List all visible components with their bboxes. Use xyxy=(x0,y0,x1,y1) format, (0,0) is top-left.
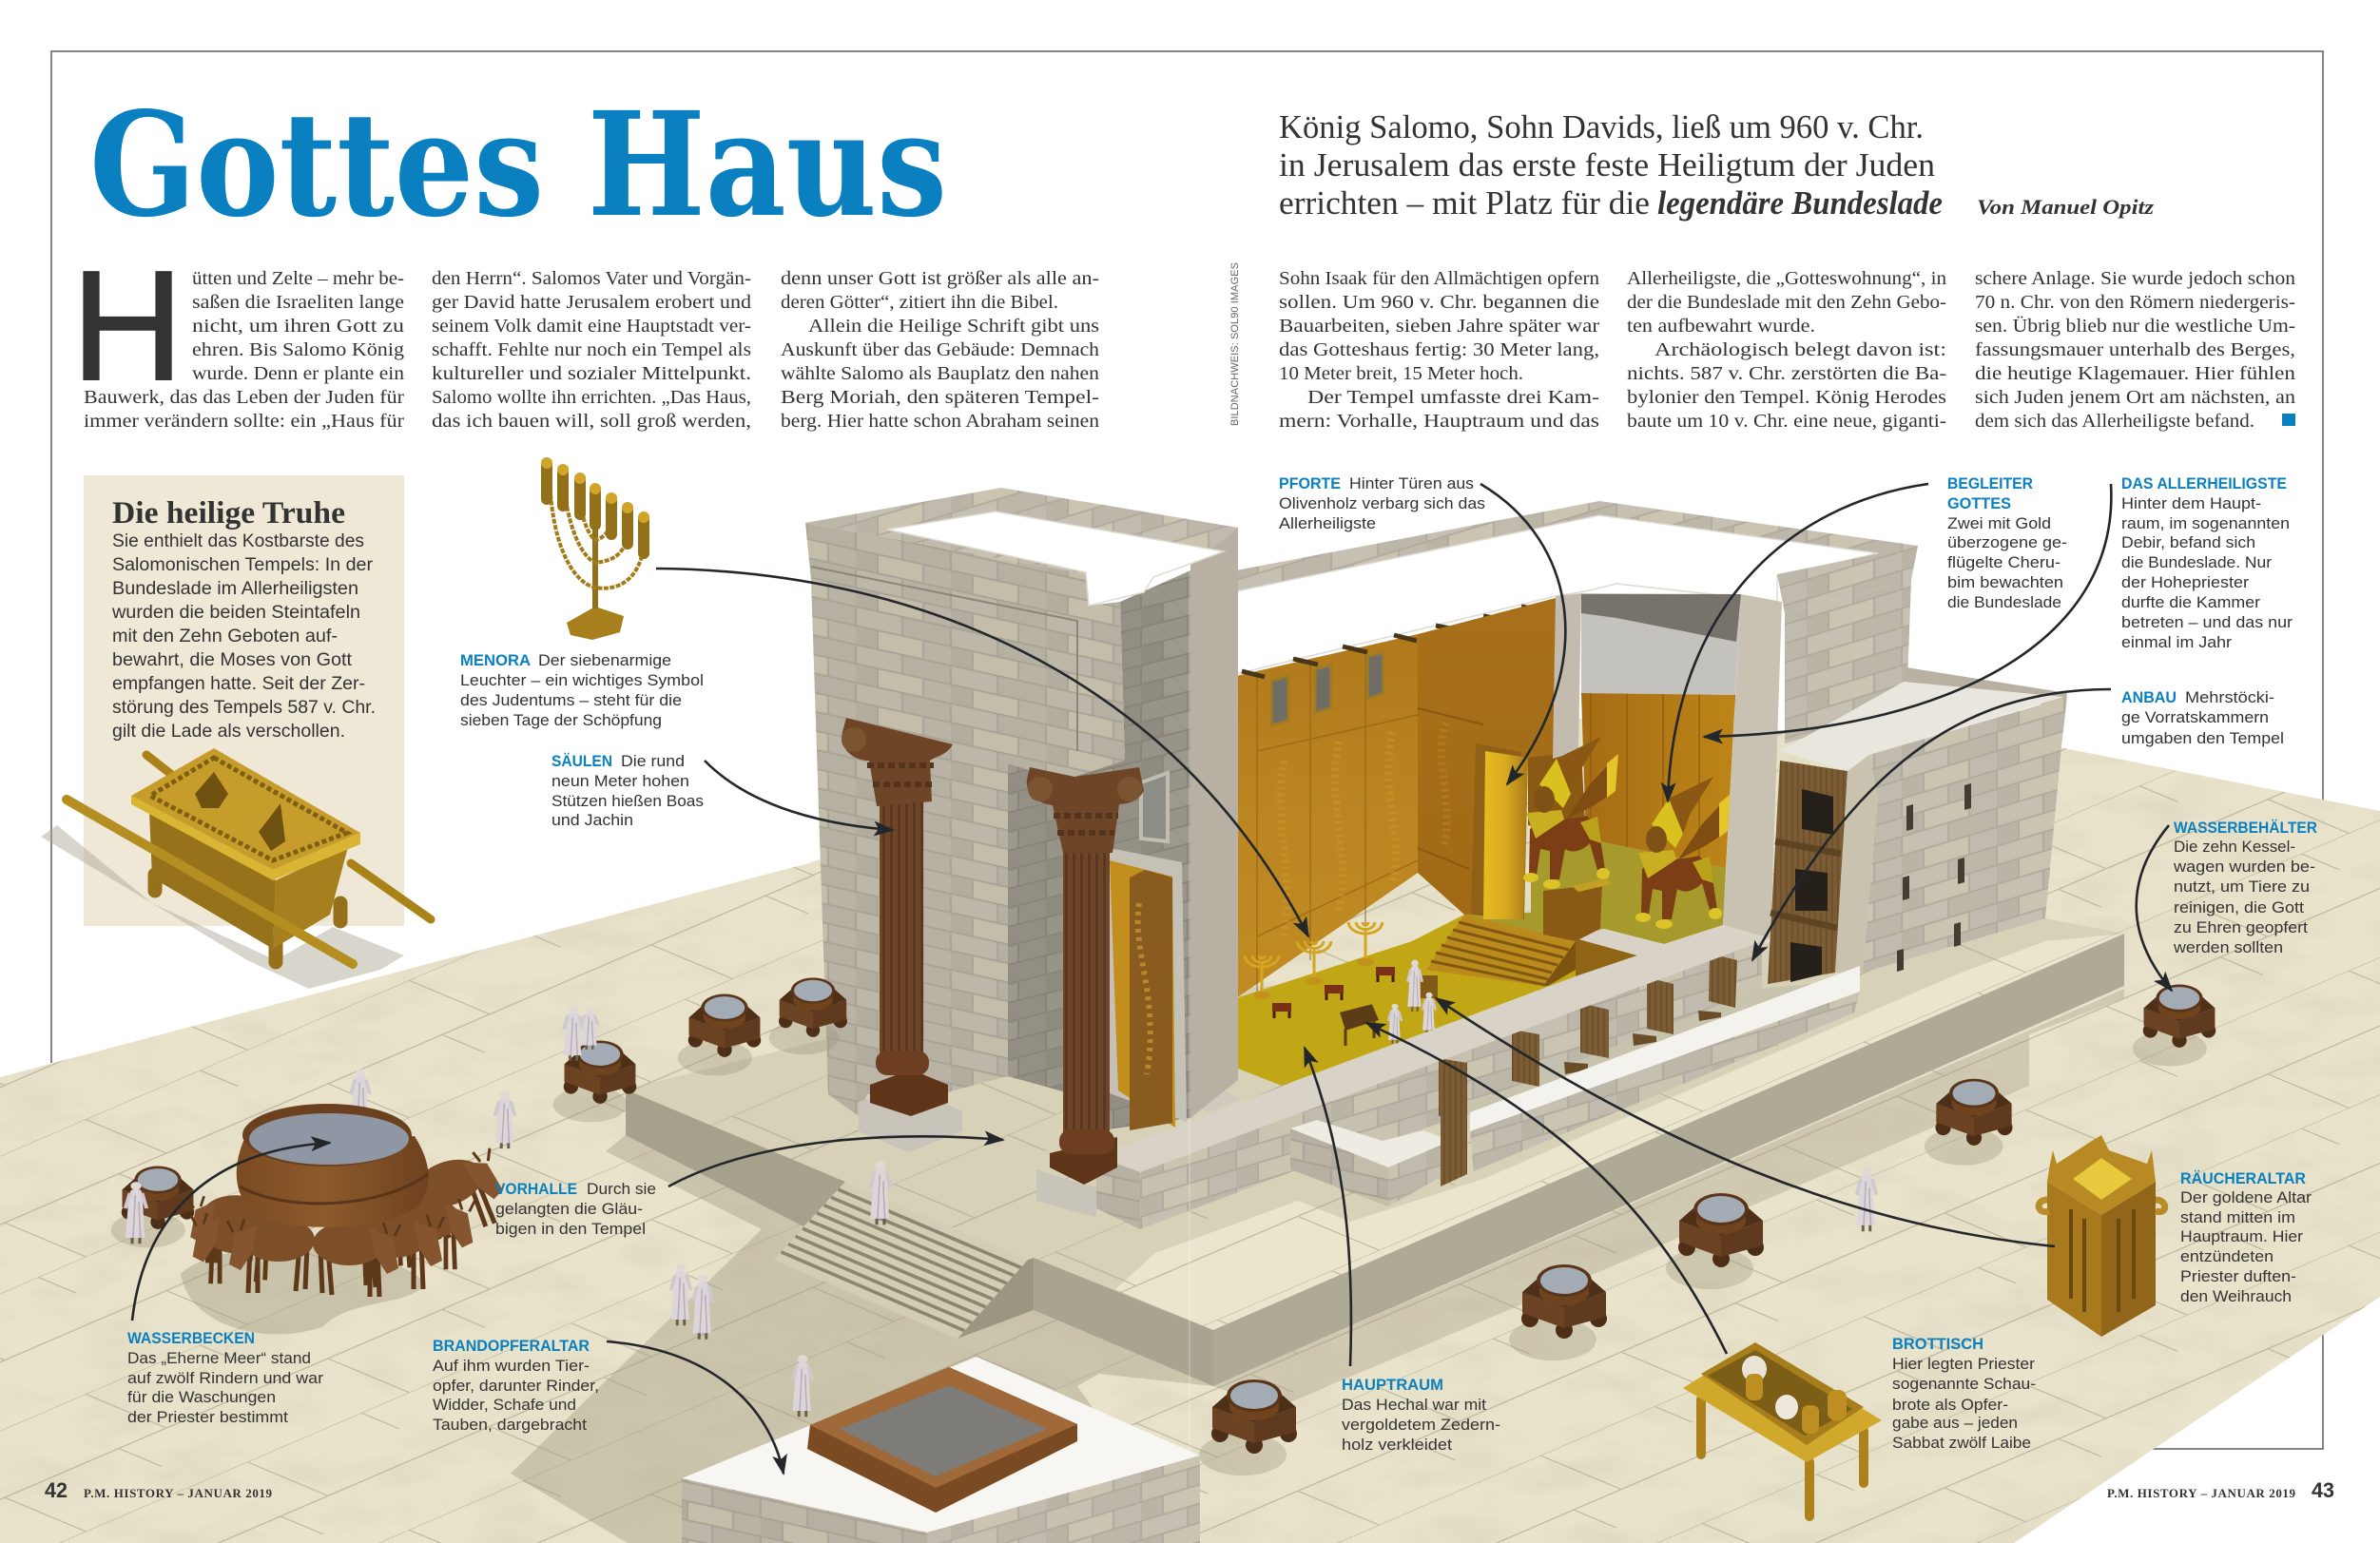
article column 6: 70 n. Chr. von den Römern niedergeris- xyxy=(1975,292,2295,313)
arrow: Räucheraltar xyxy=(1436,998,2055,1246)
article column 4: Bauarbeiten, sieben Jahre später war xyxy=(1279,316,1599,337)
temple podium xyxy=(626,918,2124,1386)
sidebar text: wurden die beiden Steintafeln xyxy=(111,603,360,623)
label: Das Allerheiligste: Debir, befand sich xyxy=(2121,533,2255,551)
tower white roof xyxy=(887,511,1224,606)
label: Brottisch: Hier legten Priester xyxy=(1892,1355,2035,1373)
label: Vorhalle: bigen in den Tempel xyxy=(495,1220,646,1238)
corridor inner wall xyxy=(1140,941,1762,1229)
article column 4 xyxy=(1279,268,1599,432)
deck text: in Jerusalem das erste feste Heiligtum der Juden xyxy=(1279,146,1935,183)
wall ornament trees xyxy=(1281,732,1395,936)
label: Brandopferaltar: Widder, Schafe und xyxy=(433,1396,576,1414)
podium left wall xyxy=(626,1090,845,1226)
label: Räucheraltar: Hauptraum. Hier xyxy=(2180,1227,2303,1245)
article column 3: berg. Hier hatte schon Abraham seinen xyxy=(781,411,1099,432)
article column 3 xyxy=(781,268,1099,432)
label: Vorhalle: Durch sie xyxy=(587,1180,656,1198)
arrow: Wasserbehälter xyxy=(2137,825,2172,991)
sidebar text: Salomonischen Tempels: In der xyxy=(112,555,374,575)
altar panels xyxy=(2071,1209,2134,1312)
sea shadow xyxy=(181,1246,426,1334)
cherub 1 xyxy=(1523,737,1618,889)
arrow: Brottisch xyxy=(1366,1023,1727,1354)
altar handles xyxy=(2039,1200,2165,1212)
rear block cap xyxy=(1777,546,1918,613)
label: Anbau: Mehrstöcki- xyxy=(2185,688,2274,706)
temple door opening xyxy=(1110,848,1187,1130)
arrow: Menora xyxy=(656,569,1308,936)
article column 1: ütten und Zelte – mehr be- xyxy=(192,268,404,289)
byline: Von Manuel Opitz xyxy=(1977,195,2154,219)
article column 6: schere Anlage. Sie wurde jedoch schon xyxy=(1975,268,2295,289)
porch rear wall lit xyxy=(847,719,1074,1094)
article column 4: mern: Vorhalle, Hauptraum und das xyxy=(1279,411,1599,432)
arrow: Begleiter Gottes xyxy=(1668,484,1928,801)
strip beside pit xyxy=(1576,929,1664,955)
altar white platform xyxy=(682,1357,1200,1533)
arrow: Anbau xyxy=(1752,689,2111,960)
article column 3: Berg Moriah, den späteren Tempel- xyxy=(781,387,1099,408)
label: Räucheraltar: RÄUCHERALTAR xyxy=(2180,1169,2306,1187)
partition pillar xyxy=(1553,593,1581,759)
article column 6 xyxy=(1975,268,2295,432)
sidebar text: Bundeslade im Allerheiligsten xyxy=(112,579,358,599)
temple door leaf xyxy=(1130,870,1172,1130)
article column 4: sollen. Um 960 v. Chr. begannen die xyxy=(1279,292,1599,313)
label: Brandopferaltar: opfer, darunter Rinder, xyxy=(433,1377,599,1395)
annex rear parapet xyxy=(1904,667,2067,708)
label: Wasserbehälter: Die zehn Kessel- xyxy=(2174,838,2295,856)
gilded wall panels xyxy=(1257,648,1418,993)
article column 1: Bauwerk, das das Leben der Juden für xyxy=(84,387,404,408)
label: Das Allerheiligste: DAS ALLERHEILIGSTE xyxy=(2121,474,2287,492)
porch side wall dark xyxy=(1008,763,1066,1092)
article column 2: ger David hatte Jerusalem erobert und xyxy=(432,292,751,313)
holy of holies floor xyxy=(1464,825,1726,944)
lid crown rim xyxy=(150,758,347,860)
tray walls xyxy=(1701,1342,1864,1445)
ark left face xyxy=(149,811,276,949)
storage floor beams xyxy=(1770,841,1841,928)
tower cut wall xyxy=(1190,528,1238,1118)
menorah arms xyxy=(551,494,644,588)
altar right face xyxy=(2101,1182,2156,1337)
label: Wasserbehälter: wagen wurden be- xyxy=(2173,858,2315,876)
title: Gottes Haus xyxy=(89,80,947,249)
main low wall end face xyxy=(1096,1156,1140,1229)
label: Brottisch: sogenannte Schau- xyxy=(1892,1375,2036,1393)
article column 6: sen. Übrig blieb nur die westliche Um- xyxy=(1975,315,2295,337)
arrow: Das Allerheiligste xyxy=(1704,484,2111,737)
label: Hauptraum: HAUPTRAUM xyxy=(1342,1376,1443,1394)
sidebar text: bewahrt, die Moses von Gott xyxy=(112,650,353,670)
altar bronze body xyxy=(807,1367,1077,1513)
sidebar text: mit den Zehn Geboten auf- xyxy=(112,627,338,646)
miniature incense altar xyxy=(1421,975,1438,998)
tray inner xyxy=(1708,1350,1852,1436)
deck text: König Salomo, Sohn Davids, ließ um 960 v. Chr. xyxy=(1279,108,1924,145)
storage openings xyxy=(1790,789,1833,982)
label: Anbau xyxy=(2121,688,2284,747)
article column 5: Allerheiligste, die „Gotteswohnung“, in xyxy=(1627,268,1946,289)
label: Säulen: Die rund xyxy=(621,752,685,770)
footer right: 43 xyxy=(2312,1478,2334,1502)
label: Menora: MENORA xyxy=(460,651,531,669)
annex wooden storage front xyxy=(1768,761,1848,984)
label: Begleiter Gottes: flügelte Cheru- xyxy=(1947,553,2061,571)
label: Das Allerheiligste: die Bundeslade. Nur xyxy=(2121,553,2272,571)
menorah lamps xyxy=(547,466,644,553)
label: Räucheraltar: Der goldene Altar xyxy=(2180,1188,2312,1206)
article column 2 xyxy=(432,268,751,432)
label: Räucheraltar xyxy=(2180,1169,2312,1305)
label: Das Allerheiligste xyxy=(2121,474,2293,651)
menorah base xyxy=(567,607,624,640)
inner stairs xyxy=(1426,915,1576,986)
article column 3: wählte Salomo als Bauplatz den nahen xyxy=(781,363,1099,384)
menorah flames xyxy=(547,463,644,517)
ark feet xyxy=(155,875,340,962)
article column 2: den Herrn“. Salomos Vater und Vorgän- xyxy=(432,268,751,289)
label: Brottisch: brote als Opfer- xyxy=(1892,1396,2008,1414)
label: Brandopferaltar: Auf ihm wurden Tier- xyxy=(433,1357,590,1375)
article column 5: Archäologisch belegt davon ist: xyxy=(1654,339,1946,360)
rear wall ornament xyxy=(1442,723,1447,846)
footer right: P.M. HISTORY – JANUAR 2019 xyxy=(2107,1486,2295,1500)
rear block wall xyxy=(1785,580,1911,743)
clerestory windows xyxy=(1271,652,1383,725)
label: Menora xyxy=(460,651,704,729)
label: Pforte: Allerheiligste xyxy=(1279,514,1376,532)
article column 6: die heutige Klagemauer. Hier fühlen xyxy=(1975,363,2295,384)
article column 1 xyxy=(84,268,404,432)
courtyard shadow left of stairs xyxy=(511,1135,1213,1543)
article column 6: fassungsmauer unterhalb des Berges, xyxy=(1975,339,2295,360)
picture credit: BILDNACHWEIS: SOL90 IMAGES xyxy=(1229,262,1241,426)
label: Wasserbecken: auf zwölf Rindern und war xyxy=(127,1369,323,1387)
wall slits xyxy=(1897,783,1971,972)
main low wall top xyxy=(1097,925,1770,1172)
sidebar panel background: die heilige Truhe xyxy=(84,475,404,926)
stairs xyxy=(774,1182,1034,1339)
label: Hauptraum: vergoldetem Zedern- xyxy=(1342,1416,1500,1434)
label: Menora: des Judentums – steht für die xyxy=(460,691,682,709)
interior priests xyxy=(1388,959,1436,1044)
annex big side wall xyxy=(1863,697,2067,973)
podium lit paving xyxy=(1115,934,2124,1330)
article column 2: schafft. Fehlte nur noch ein Tempel als xyxy=(432,339,751,360)
label: Begleiter Gottes: überzogene ge- xyxy=(1947,533,2067,551)
label: Das Allerheiligste: Hinter dem Haupt- xyxy=(2121,494,2261,512)
label: Brottisch: BROTTISCH xyxy=(1892,1335,1983,1353)
sidebar text: Sie enthielt das Kostbarste des xyxy=(112,531,364,551)
capital xyxy=(842,718,953,806)
label: Begleiter Gottes: GOTTES xyxy=(1947,494,2011,512)
label: Wasserbehälter: reinigen, die Gott xyxy=(2174,898,2304,916)
article column 1: immer verändern sollte: ein „Haus für xyxy=(84,411,404,432)
ceiling beams xyxy=(1242,607,1542,677)
article column 5: der die Bundeslade mit den Zehn Gebo- xyxy=(1627,292,1946,313)
label: Das Allerheiligste: einmal im Jahr xyxy=(2121,633,2232,651)
altar bowl xyxy=(2073,1158,2132,1200)
label: Menora: sieben Tage der Schöpfung xyxy=(460,711,662,729)
water carts xyxy=(111,977,2216,1475)
altar rim xyxy=(810,1367,1077,1488)
footer left: P.M. HISTORY – JANUAR 2019 xyxy=(84,1486,272,1500)
label: Wasserbecken xyxy=(127,1329,323,1426)
cherub 2 xyxy=(1635,777,1731,929)
label: Wasserbehälter: nutzt, um Tiere zu xyxy=(2174,878,2310,896)
gilded left wall xyxy=(1236,634,1418,998)
article column 1: saßen die Israeliten lange xyxy=(192,292,404,313)
label: Vorhalle: VORHALLE xyxy=(495,1180,577,1198)
drop cap: H xyxy=(71,239,184,413)
article column 5: baute um 10 v. Chr. eine neue, giganti- xyxy=(1627,411,1946,432)
label: Menora: Leuchter – ein wichtiges Symbol xyxy=(460,671,704,689)
interior stools xyxy=(1272,967,1395,1018)
ark chest xyxy=(1543,878,1612,941)
label: Säulen: und Jachin xyxy=(551,811,633,829)
burnt offering altar xyxy=(682,1357,1200,1543)
tabletop xyxy=(1683,1342,1882,1462)
menorah xyxy=(547,463,644,640)
label: Wasserbehälter: werden sollten xyxy=(2173,938,2283,956)
courtyard shadow along podium xyxy=(1213,989,2124,1409)
bowl rim xyxy=(242,1104,412,1167)
door to holy of holies xyxy=(1471,743,1528,919)
altar grate xyxy=(840,1385,1047,1476)
article column 5: bylonier den Tempel. König Herodes xyxy=(1627,387,1946,408)
label: Wasserbehälter: WASSERBEHÄLTER xyxy=(2174,819,2317,837)
article column 4: 10 Meter breit, 15 Meter hoch. xyxy=(1279,363,1523,384)
arrow: Brandopferaltar xyxy=(607,1341,784,1474)
tower cornice line xyxy=(811,567,1077,751)
capital xyxy=(1027,767,1144,853)
label: Wasserbecken: WASSERBECKEN xyxy=(127,1329,255,1347)
sidebar text: gilt die Lade als verschollen. xyxy=(112,722,345,742)
deck text xyxy=(1279,108,1943,222)
label: Räucheraltar: Priester duften- xyxy=(2180,1267,2296,1285)
L-shaped wall block xyxy=(1290,1120,1451,1206)
wall under partition xyxy=(1528,751,1586,839)
label: Das Allerheiligste: der Hohepriester xyxy=(2121,573,2249,591)
article column 2: das ich bauen will, soll groß werden, xyxy=(432,411,751,432)
main hall rear parapet xyxy=(1236,501,1918,591)
label: Brandopferaltar xyxy=(433,1337,599,1434)
outer low wall top xyxy=(1470,966,1860,1131)
tower upper inner wall xyxy=(1120,570,1190,761)
tower front face xyxy=(805,523,1125,1116)
deck text: legendäre Bundeslade xyxy=(1657,184,1943,222)
front carrying pole xyxy=(67,800,353,964)
label: Das Allerheiligste: betreten – und das nur xyxy=(2121,613,2293,631)
label: Wasserbehälter: zu Ehren geopfert xyxy=(2174,918,2308,936)
label: Hauptraum: holz verkleidet xyxy=(1342,1436,1452,1454)
end mark xyxy=(2282,414,2295,426)
tower base connector xyxy=(1179,1080,1242,1112)
altar left face xyxy=(2047,1182,2101,1337)
article column 1: wurde. Denn er plante ein xyxy=(192,363,404,384)
column Jachin xyxy=(1027,767,1144,1217)
deck text: errichten – mit Platz für die xyxy=(1279,184,1650,222)
porch small window xyxy=(1141,773,1168,841)
footer left xyxy=(45,1478,272,1502)
article column 3: deren Götter“, zitiert ihn die Bibel. xyxy=(781,292,1058,313)
podium top surface xyxy=(626,918,2124,1330)
altar crown xyxy=(2047,1135,2156,1215)
label: Begleiter Gottes xyxy=(1947,474,2067,611)
article column 4: das Gotteshaus fertig: 30 Meter lang, xyxy=(1279,339,1599,360)
label: Räucheraltar: entzündeten xyxy=(2180,1247,2274,1265)
label: Begleiter Gottes: BEGLEITER xyxy=(1947,474,2033,492)
label: Wasserbehälter xyxy=(2173,819,2317,956)
label: Begleiter Gottes: die Bundeslade xyxy=(1947,593,2061,611)
article column 5: ten aufbewahrt wurde. xyxy=(1627,316,1815,337)
cherubim on lid xyxy=(195,772,285,851)
article column 5 xyxy=(1627,268,1946,432)
label: Säulen: neun Meter hohen xyxy=(551,772,689,790)
sidebar heading: Die heilige Truhe xyxy=(112,496,345,530)
golden floor xyxy=(1233,915,1576,1086)
podium front-right face xyxy=(1213,934,2124,1386)
label: Vorhalle: gelangten die Gläu- xyxy=(495,1200,643,1218)
label: Menora: Der siebenarmige xyxy=(538,651,671,669)
sidebar text xyxy=(111,531,376,742)
golden incense altar xyxy=(2039,1135,2165,1337)
label: Hauptraum: Das Hechal war mit xyxy=(1342,1396,1486,1414)
sidebar text: empfangen hatte. Seit der Zer- xyxy=(112,674,365,694)
ark right face xyxy=(273,847,348,949)
footer right xyxy=(2107,1478,2334,1502)
altar platform left stone side xyxy=(682,1478,927,1543)
ark shadow xyxy=(41,825,404,989)
holy of holies ceiling dark xyxy=(1581,594,1741,642)
interior menorahs xyxy=(1245,922,1383,999)
water surface xyxy=(249,1113,409,1165)
label: Hauptraum xyxy=(1342,1376,1500,1454)
article column 2: seinem Volk damit eine Hauptstadt ver- xyxy=(432,316,751,337)
outer low wall face xyxy=(1470,992,1860,1171)
front tower xyxy=(805,488,1238,1217)
article column 3: Allein die Heilige Schrift gibt uns xyxy=(808,316,1099,337)
column Boas xyxy=(842,718,962,1152)
label: Brandopferaltar: Tauben, dargebracht xyxy=(433,1416,587,1434)
pit beside stairs xyxy=(1576,938,1637,976)
label: Pforte: Hinter Türen aus xyxy=(1349,474,1474,492)
label: Pforte xyxy=(1279,474,1485,532)
label: Räucheraltar: stand mitten im xyxy=(2180,1208,2295,1226)
rear carrying pole xyxy=(146,755,431,919)
annex corner pillar xyxy=(1835,755,1878,973)
label: Begleiter Gottes: bim bewachten xyxy=(1947,573,2063,591)
arrow: Wasserbecken xyxy=(132,1143,330,1321)
main hall interior xyxy=(1233,593,1741,1086)
label: Anbau: ge Vorratskammern xyxy=(2121,708,2269,726)
label: Pforte: PFORTE xyxy=(1279,474,1341,492)
article column 1: nicht, um ihren Gott zu xyxy=(192,316,404,337)
label: Pforte: Olivenholz verbarg sich das xyxy=(1279,494,1485,512)
priest behind bronze sea xyxy=(351,1069,370,1128)
article column 6: dem sich das Allerheiligste befand. xyxy=(1975,411,2254,432)
article column 1: ehren. Bis Salomo König xyxy=(192,339,404,360)
article column 4: Der Tempel umfasste drei Kam- xyxy=(1307,387,1599,408)
gilded rear wall xyxy=(1418,598,1556,917)
sidebar text: störung des Tempels 587 v. Chr. xyxy=(112,698,376,718)
podium front-left face xyxy=(1034,1258,1213,1386)
arrows xyxy=(132,484,2172,1474)
article column 3: Auskunft über das Gebäude: Demnach xyxy=(781,339,1099,360)
label: Säulen xyxy=(551,752,704,829)
miniature bread table xyxy=(1342,1006,1377,1046)
porch right wall with door xyxy=(1066,740,1190,1131)
lid edge xyxy=(131,796,360,880)
label: Wasserbecken: für die Waschungen xyxy=(127,1388,276,1406)
article column 3: denn unser Gott ist größer als alle an- xyxy=(781,268,1099,289)
label: Wasserbecken: der Priester bestimmt xyxy=(127,1408,288,1426)
priests on courtyard xyxy=(126,1006,1876,1417)
arrow: Hauptraum xyxy=(1305,1048,1351,1366)
holy of holies ceiling light xyxy=(1581,593,1741,695)
label: Brandopferaltar: BRANDOPFERALTAR xyxy=(433,1337,590,1355)
legs xyxy=(1701,1399,1864,1516)
temple courtyard floor xyxy=(0,704,2380,1543)
article column 2: kultureller und sozialer Mittelpunkt. xyxy=(432,363,751,384)
label: Anbau: umgaben den Tempel xyxy=(2121,729,2284,747)
bread table xyxy=(1683,1342,1882,1516)
holy of holies wall xyxy=(1581,693,1735,868)
label: Säulen: Stützen hießen Boas xyxy=(551,792,704,810)
label: Das Allerheiligste: raum, im sogenannten xyxy=(2121,514,2290,532)
label: Säulen: SÄULEN xyxy=(551,752,612,770)
article column 4: Sohn Isaak für den Allmächtigen opfern xyxy=(1279,268,1599,289)
label: Begleiter Gottes: Zwei mit Gold xyxy=(1947,514,2051,532)
arrow: Pforte xyxy=(1480,484,1565,784)
article column 5: nichts. 587 v. Chr. zerstörten die Ba- xyxy=(1627,363,1946,384)
ark of the covenant xyxy=(41,748,431,989)
label: Brottisch: gabe aus – jeden xyxy=(1892,1414,2018,1432)
article column 6: sich Juden jenem Ort am nächsten, an xyxy=(1975,387,2295,408)
wooden entry post xyxy=(1441,1108,1467,1186)
ark lid xyxy=(131,748,360,870)
bronze sea on twelve oxen xyxy=(181,1104,514,1334)
menorah stem xyxy=(592,494,598,608)
arrow: Säulen xyxy=(705,761,893,830)
spread fold line xyxy=(1189,551,1190,1543)
label: Brottisch: Sabbat zwölf Laibe xyxy=(1892,1434,2031,1452)
label: Wasserbecken: Das „Eherne Meer“ stand xyxy=(127,1349,311,1367)
footer left: 42 xyxy=(45,1478,68,1502)
oxen xyxy=(188,1146,514,1297)
jars and loaves xyxy=(1742,1356,1847,1434)
bowl xyxy=(237,1136,429,1227)
label: Vorhalle xyxy=(495,1180,656,1238)
label: Räucheraltar: den Weihrauch xyxy=(2180,1287,2292,1305)
label: Das Allerheiligste: durfte die Kammer xyxy=(2121,593,2260,611)
article column 2: Salomo wollte ihn errichten. „Das Haus, xyxy=(432,387,751,408)
main hall white roof xyxy=(1236,515,1878,674)
label: Brottisch xyxy=(1892,1335,2036,1452)
corridor floor xyxy=(1450,984,1811,1114)
tower parapet xyxy=(805,488,1238,574)
right pillar between hall and rear block xyxy=(1723,594,1782,938)
wooden posts in corridor xyxy=(1439,954,1737,1116)
altar platform right stone side xyxy=(927,1456,1200,1543)
arrow: Vorhalle xyxy=(668,1136,1003,1186)
label: Anbau: ANBAU xyxy=(2121,688,2177,706)
annex roof xyxy=(1780,682,2064,771)
